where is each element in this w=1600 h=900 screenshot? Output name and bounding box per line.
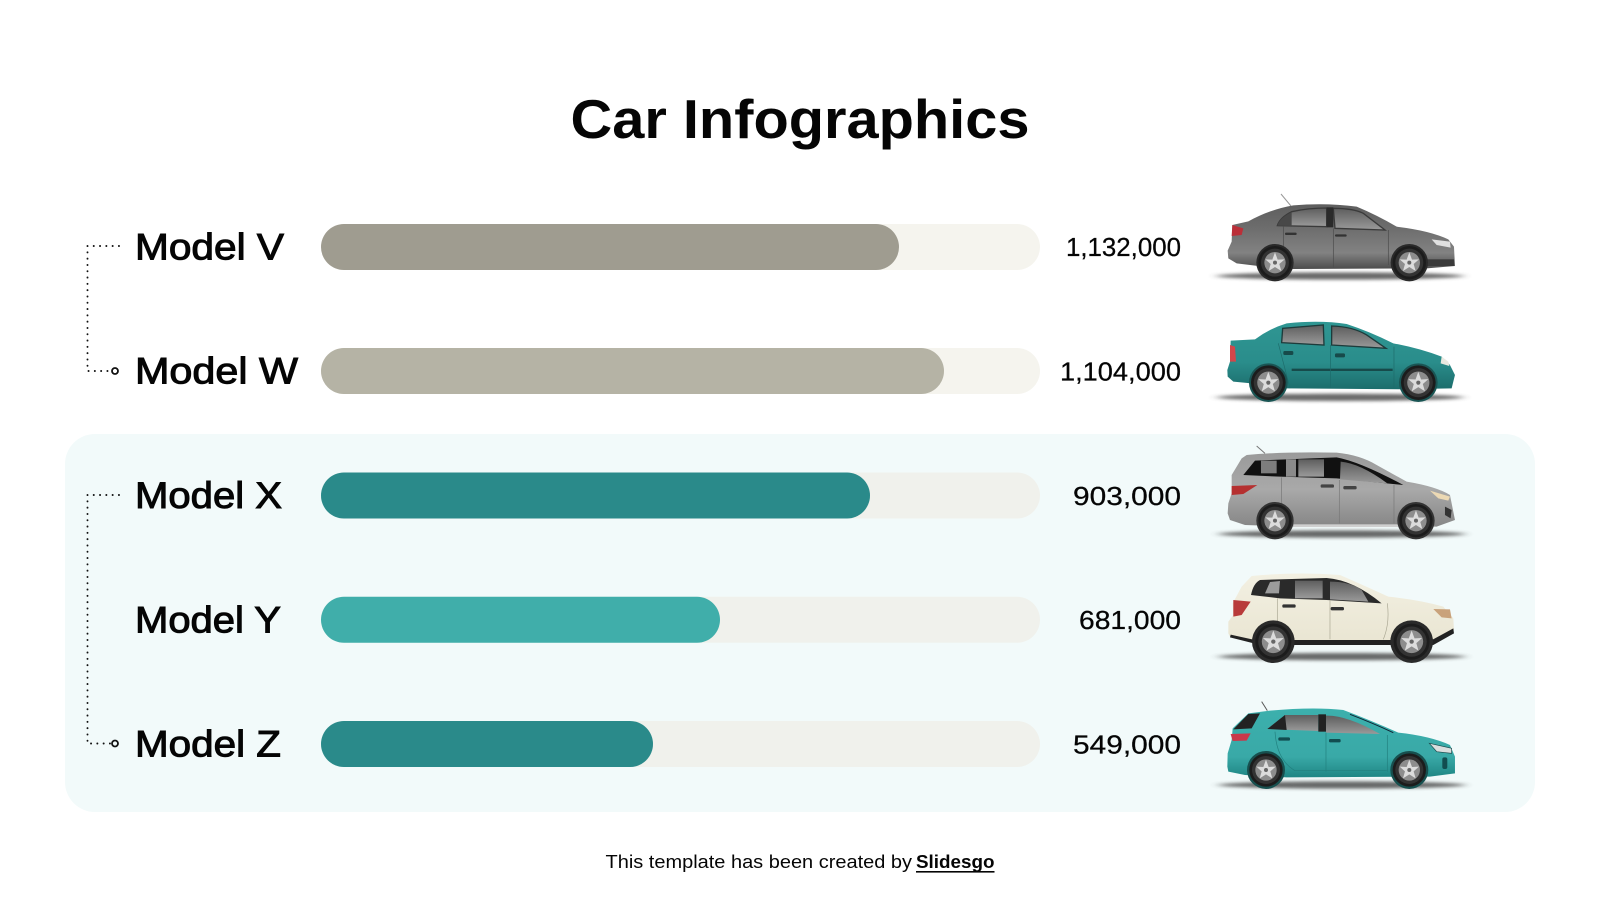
row: Model W: [135, 322, 1463, 402]
value: 549,000: [1073, 730, 1181, 760]
connector: Model X to Model Z: [88, 495, 119, 746]
row: Model Y: [135, 574, 1465, 663]
bar track: [321, 472, 1040, 518]
footer credit: Slidesgo: [916, 851, 994, 872]
bar track: [321, 348, 1040, 394]
label: Model V: [135, 226, 284, 268]
icon: silver minivan: [1218, 446, 1465, 539]
icon: grey sedan: [1217, 194, 1463, 281]
bar fill: [321, 472, 870, 518]
value: 1,104,000: [1060, 356, 1181, 386]
panel: highlighted models: [65, 434, 1535, 812]
bar fill: [321, 348, 944, 394]
icon: turquoise hatchback: [1218, 702, 1465, 789]
label: Model W: [135, 350, 298, 392]
bar track: [321, 721, 1040, 767]
bar fill: [321, 597, 720, 643]
icon: cream SUV: [1218, 574, 1465, 663]
bar track: [321, 224, 1040, 270]
icon: teal sedan: [1217, 322, 1463, 402]
row: Model V: [135, 194, 1463, 281]
label: Model Z: [135, 724, 281, 764]
value: 681,000: [1079, 605, 1181, 635]
value: 903,000: [1073, 481, 1181, 511]
bar track: [321, 597, 1040, 643]
connector: Model V to Model W: [88, 246, 119, 374]
row: Model X: [135, 446, 1465, 539]
value: 1,132,000: [1066, 232, 1181, 262]
footer credit: This template has been created by: [606, 851, 913, 872]
row: Model Z: [135, 702, 1465, 789]
label: Model Y: [135, 600, 281, 640]
label: Model X: [135, 475, 282, 516]
title: Car Infographics: [570, 88, 1030, 150]
bar fill: [321, 721, 653, 767]
bar fill: [321, 224, 899, 270]
